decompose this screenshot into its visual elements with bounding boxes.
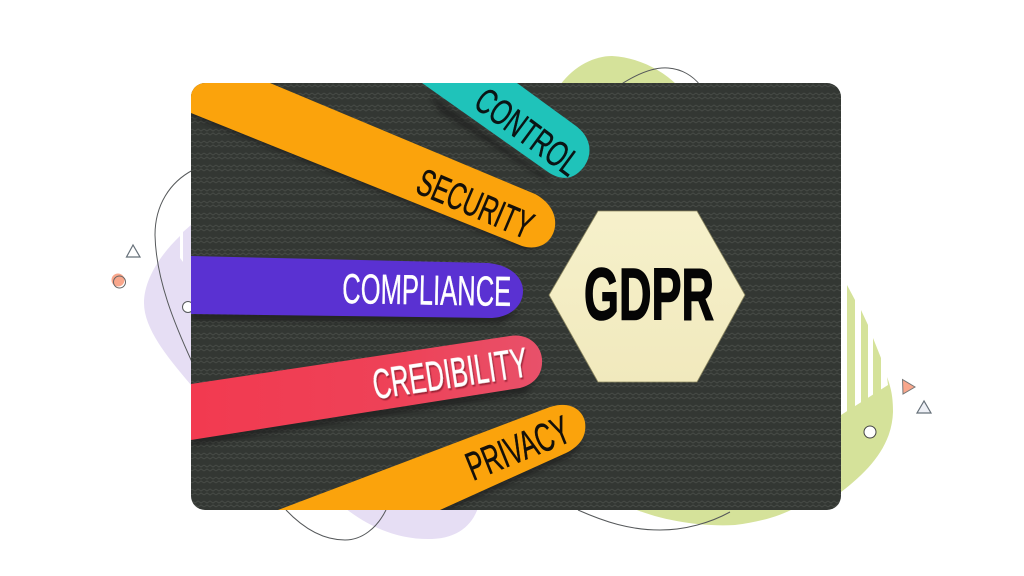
stick: compliance (191, 256, 523, 318)
icon: small circle left (182, 302, 194, 312)
icon: orange triangle (902, 380, 915, 394)
icon: triangle right (917, 401, 931, 413)
background blob: green (560, 56, 893, 525)
panel: photo (191, 79, 841, 514)
hexagon badge (549, 211, 745, 382)
icon: orange circle (112, 274, 126, 288)
stick: security (191, 83, 555, 248)
stick: credibility (191, 336, 542, 440)
background blob: purple (144, 225, 478, 539)
infographic (112, 56, 932, 540)
decorative outline curves (155, 68, 730, 540)
label: privacy: PRIVACY (460, 408, 577, 489)
stick: privacy (278, 405, 585, 510)
label: control: CONTROL (467, 79, 588, 184)
icon: small circle right (864, 426, 876, 438)
icon: triangle top left (126, 245, 140, 257)
label: GDPR: GDPR (584, 254, 714, 336)
label: security: SECURITY (410, 162, 539, 248)
stick shadows (191, 95, 585, 514)
label: credibility: CREDIBILITY (369, 338, 531, 408)
stick: control (422, 79, 589, 184)
label: compliance: COMPLIANCE (342, 265, 512, 315)
